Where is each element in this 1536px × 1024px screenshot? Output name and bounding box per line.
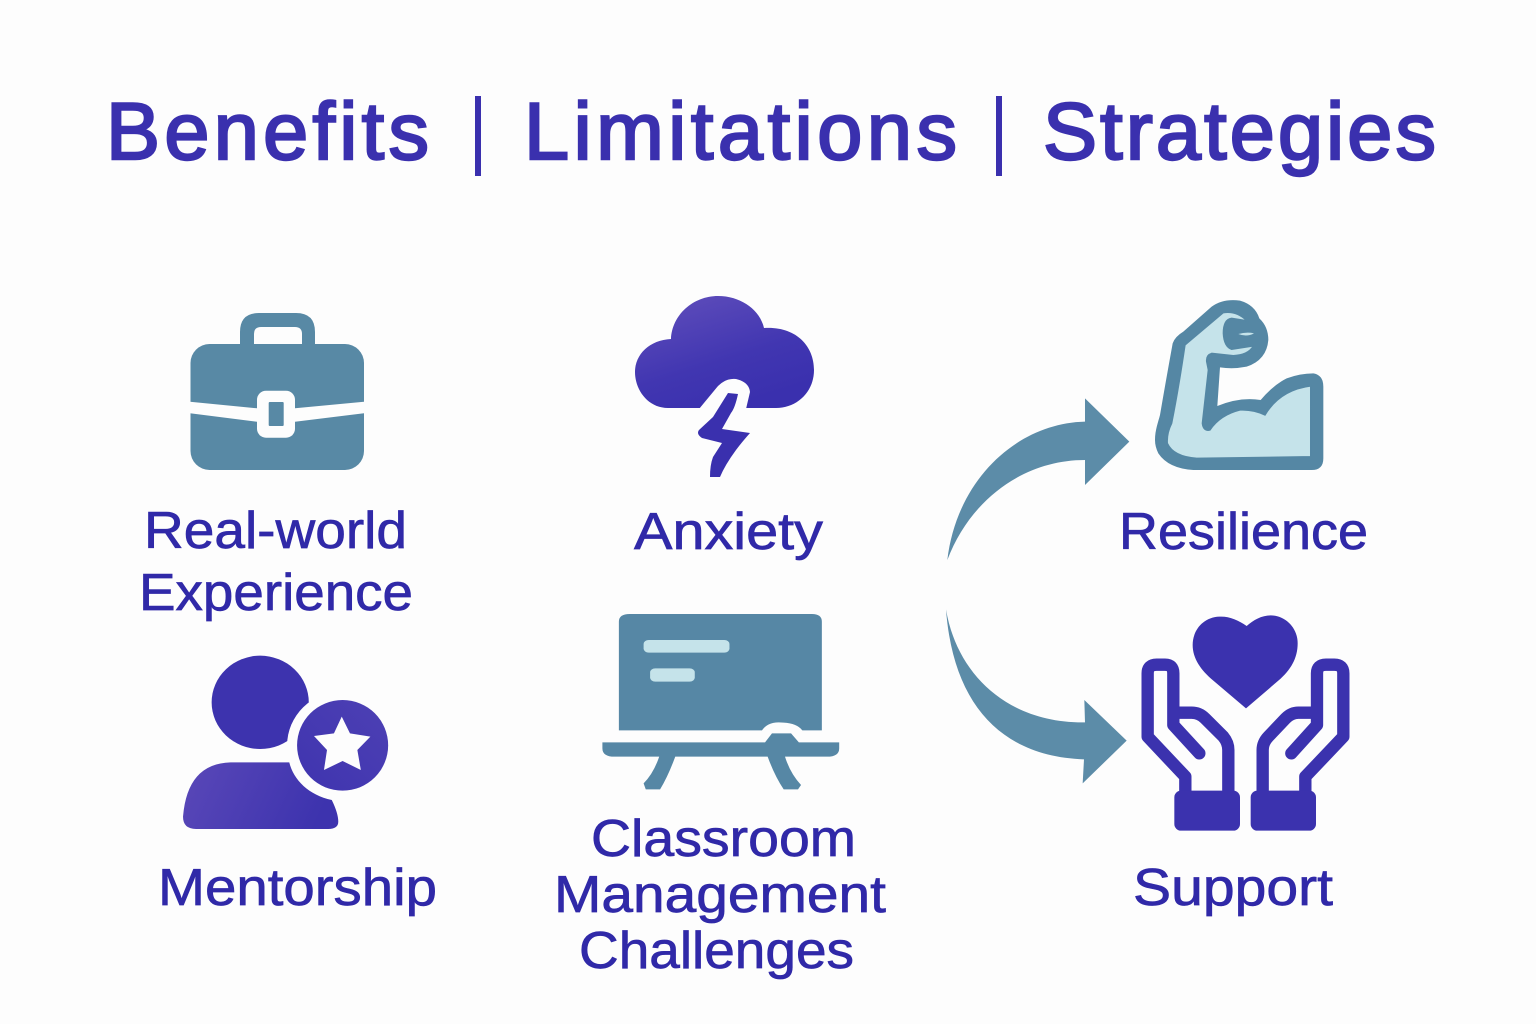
heading: strategies: Strategies [1043,87,1436,177]
label: classroom management challenges: Management [554,866,887,924]
left cuff [1174,791,1240,831]
title divider 2 [996,96,1002,176]
arrow: down to support [946,609,1127,783]
icon: flexed arm [1155,300,1323,470]
label: support: Support [1133,859,1334,917]
icon: chalkboard [602,614,839,789]
label: real-world experience: Experience [139,564,413,622]
right hand [1263,665,1343,793]
heading: benefits: Benefits [106,87,429,177]
label: mentorship: Mentorship [158,859,437,917]
label: classroom management challenges: Challenges [579,922,854,980]
label: real-world experience [139,502,413,622]
label: classroom management challenges [554,810,887,980]
right cuff [1251,791,1316,831]
title divider 1 [475,96,481,176]
label: resilience: Resilience [1119,503,1368,561]
label: classroom management challenges: Classroom [591,810,856,868]
icon: briefcase [190,313,364,470]
label: anxiety: Anxiety [634,503,823,561]
icon: storm cloud [635,296,814,477]
left hand [1148,665,1228,793]
arrow: up to resilience [947,398,1129,560]
icon: hands holding heart [1148,615,1343,831]
title [106,87,1436,177]
heading: limitations: Limitations [524,87,957,177]
heart [1193,615,1298,708]
label: real-world experience: Real-world [144,502,407,560]
icon: mentor with star badge [183,656,398,829]
